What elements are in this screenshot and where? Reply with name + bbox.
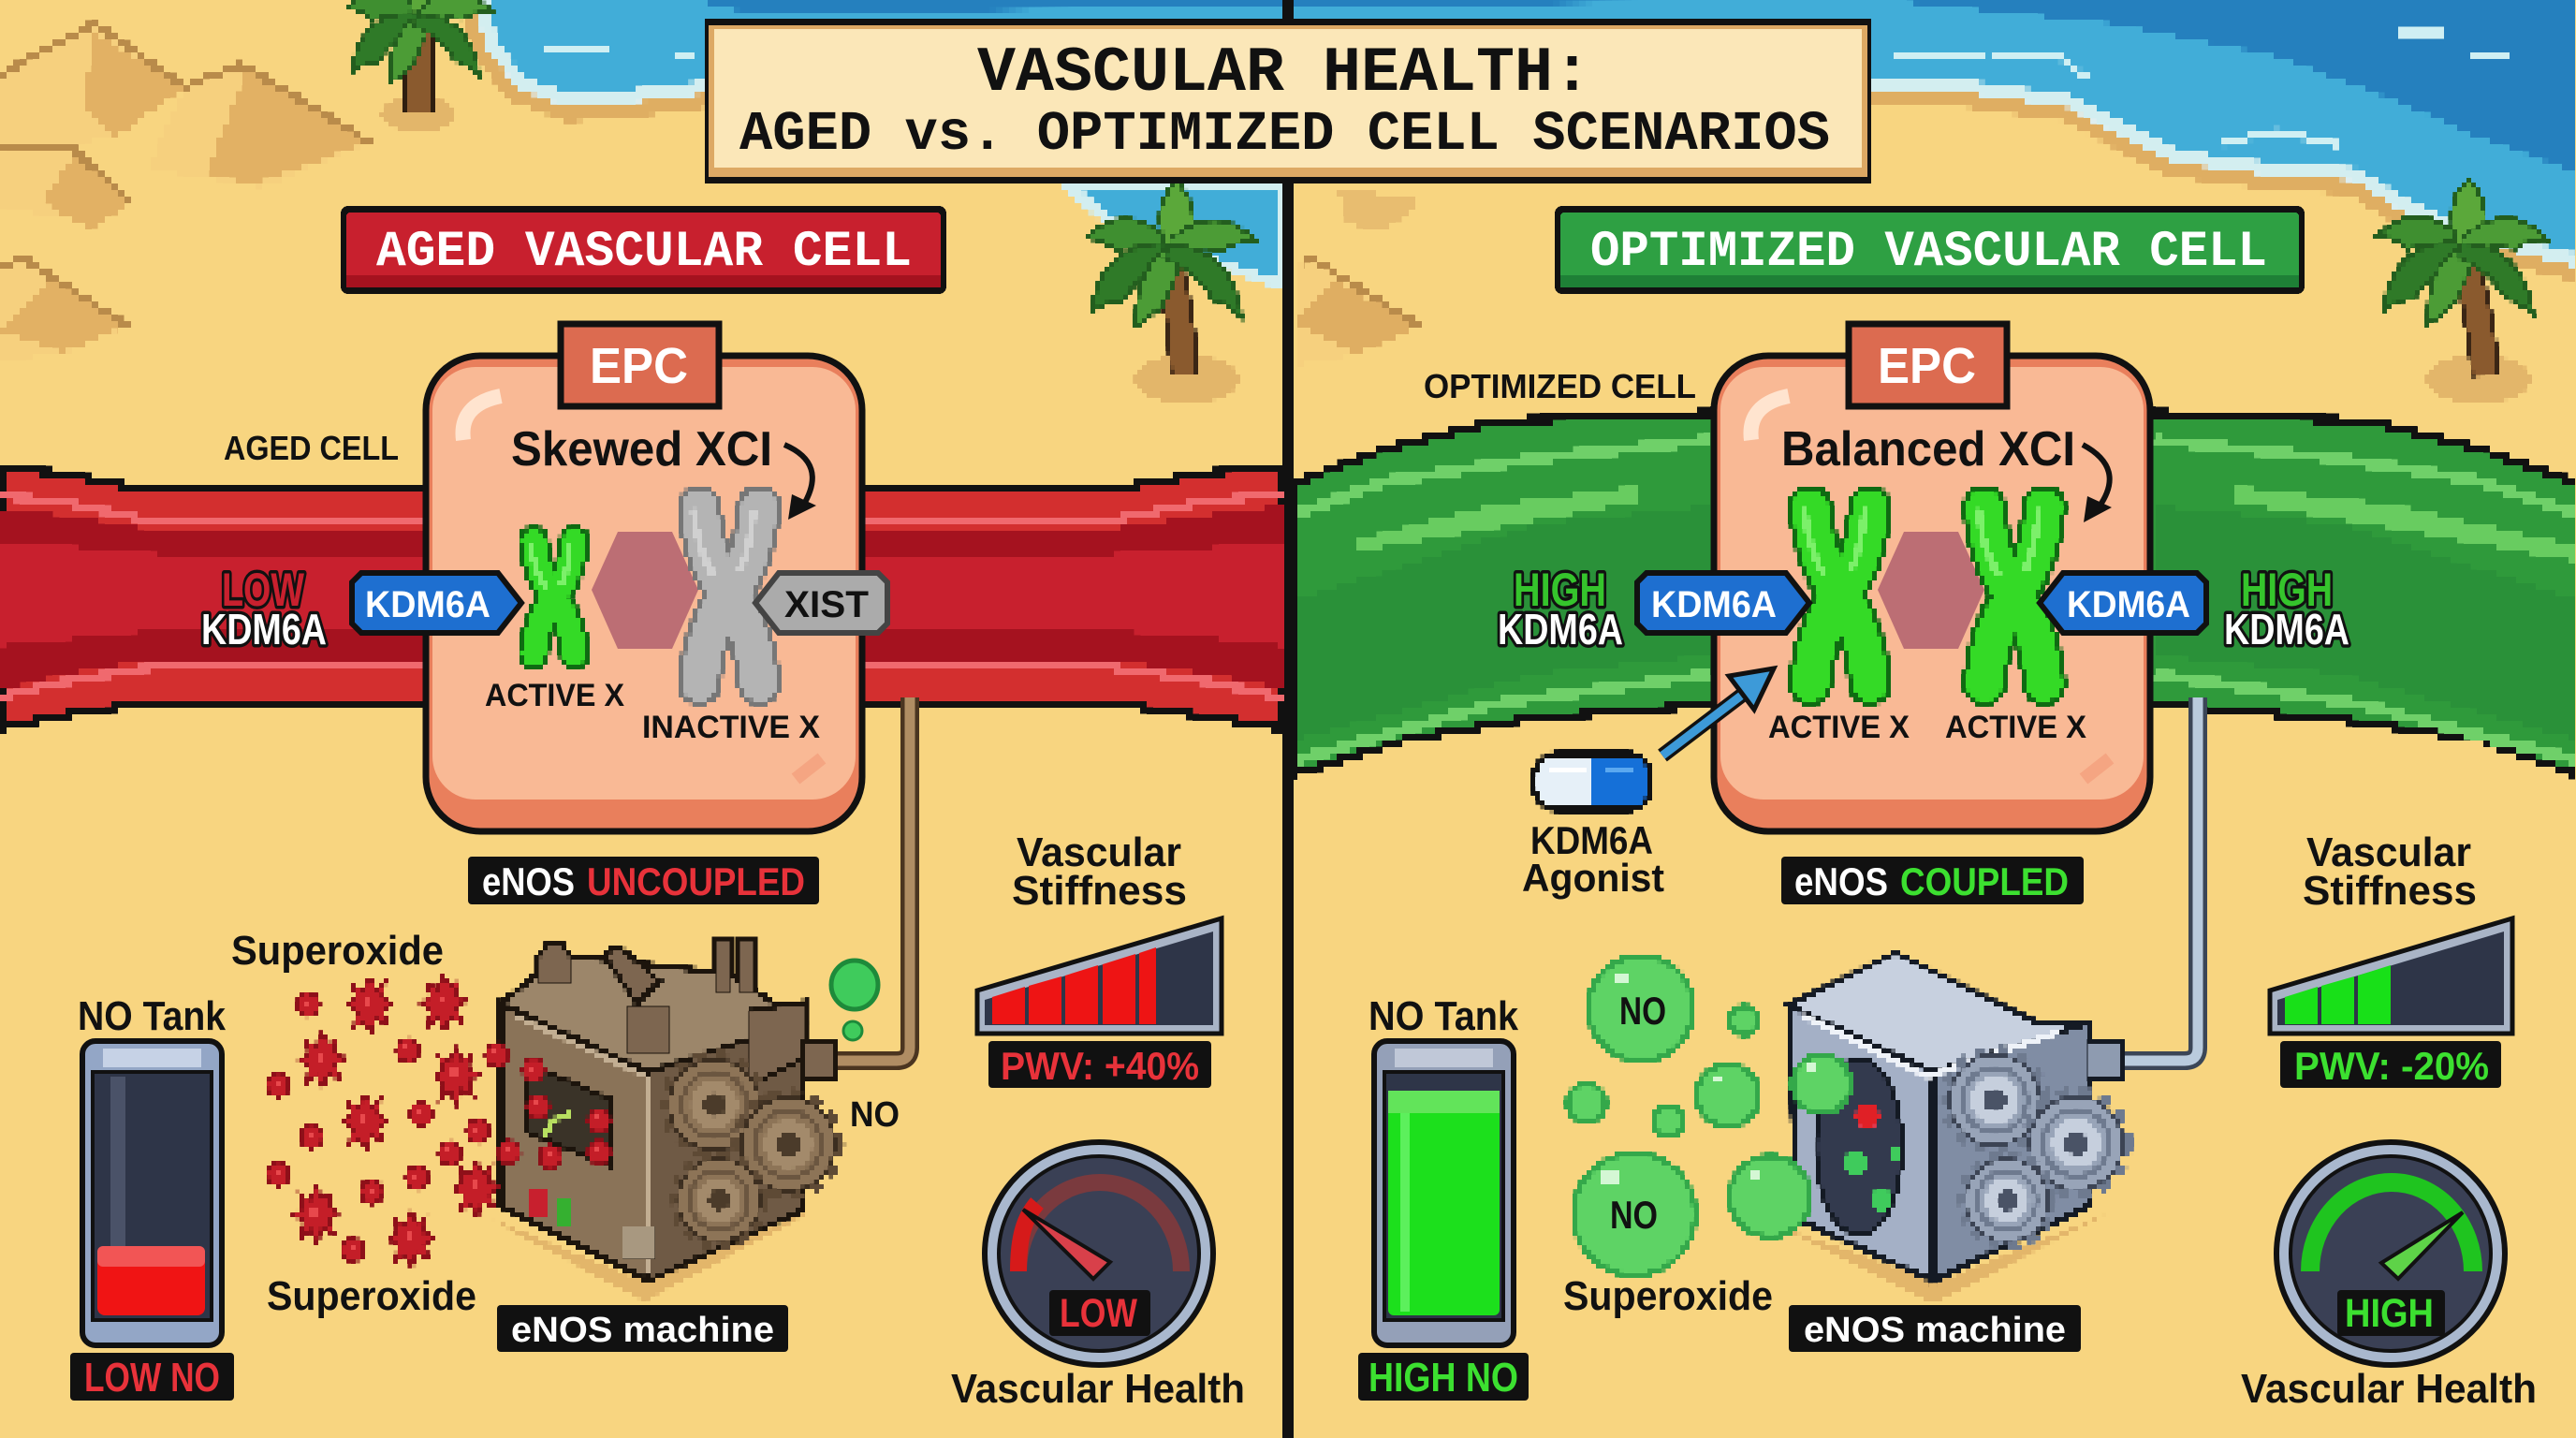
tag: KDM6A aged: KDM6A <box>365 584 490 625</box>
panel: EPC optimized <box>1714 324 2150 831</box>
pipe joint <box>803 1041 837 1080</box>
gauge: low: LOW <box>1060 1291 1137 1336</box>
label: vascular stiffness optimized: Vascular <box>2306 829 2471 875</box>
label: NO tank optimized: NO Tank <box>1368 993 1518 1039</box>
title line 2: AGED vs. OPTIMIZED CELL SCENARIOS <box>739 103 1830 166</box>
label: aged cell: AGED CELL <box>224 429 399 467</box>
label: eNOS machine aged: eNOS machine <box>511 1311 774 1350</box>
tag: KDM6A aged <box>352 573 521 633</box>
tag: KDM6A optimized right <box>2040 573 2206 633</box>
needle <box>1023 1210 1110 1279</box>
meter: stiffness optimized <box>2270 918 2512 1034</box>
panel: EPC aged <box>426 324 862 831</box>
screen <box>1816 1059 1902 1235</box>
banner: aged: AGED VASCULAR CELL <box>376 224 912 281</box>
NO bubble: large <box>831 961 878 1009</box>
label: eNOS machine optimized: eNOS machine <box>1804 1311 2066 1350</box>
inactive X chromosome <box>694 507 759 683</box>
label: active X left: ACTIVE X <box>1768 710 1910 745</box>
title line 1: VASCULAR HEALTH: <box>977 37 1591 110</box>
arrow: agonist to X <box>1662 668 1774 756</box>
EPC tab <box>1849 324 2007 406</box>
label: vascular stiffness aged: Vascular <box>1017 829 1181 875</box>
EPC label: EPC <box>1878 338 1976 394</box>
tank: high <box>1374 1041 1514 1345</box>
heading: skewed XCI: Skewed XCI <box>511 422 772 477</box>
tag: KDM6A optimized left <box>1637 573 1809 633</box>
gears <box>1947 1052 2125 1243</box>
active X chromosome right <box>1979 507 2044 683</box>
NO bubble label bottom: NO <box>1610 1193 1658 1237</box>
artery: aged <box>0 468 1281 728</box>
EPC tab <box>561 324 719 406</box>
label: KDM6A high right: KDM6A <box>2224 605 2349 653</box>
label: superoxide top: Superoxide <box>231 928 444 974</box>
palm tree: right panel right <box>2378 180 2548 404</box>
label: KDM6A high left: KDM6A <box>1498 605 1623 653</box>
label: vascular stiffness optimized <box>2303 829 2477 914</box>
heading: balanced XCI: Balanced XCI <box>1781 422 2075 477</box>
artery: optimized <box>1295 413 2576 774</box>
indicator line <box>545 1114 573 1137</box>
shadow highlight <box>796 758 822 779</box>
panel buttons <box>529 1187 654 1258</box>
pipe inner: aged <box>833 697 910 1061</box>
label: superoxide right panel: Superoxide <box>1563 1273 1773 1319</box>
pipe inner: optimized <box>2121 697 2198 1061</box>
label: KDM6A agonist: KDM6A <box>1530 818 1653 862</box>
NO bubble label top: NO <box>1619 989 1666 1033</box>
palm tree: left panel right <box>1086 182 1256 404</box>
screen <box>526 1063 612 1167</box>
chimneys <box>538 941 805 1086</box>
enos machine: optimized <box>1778 953 2125 1303</box>
curved arrow <box>2083 445 2112 522</box>
highlight <box>462 396 501 440</box>
label: NO: NO <box>850 1095 900 1135</box>
superoxide particles <box>267 976 610 1268</box>
label: superoxide bottom: Superoxide <box>267 1273 476 1319</box>
tag: KDM6A optimized right: KDM6A <box>2067 584 2190 625</box>
label: low NO: LOW NO <box>84 1355 220 1401</box>
label: active X right: ACTIVE X <box>1945 710 2086 745</box>
tag: XIST: XIST <box>784 584 869 625</box>
PWV aged: PWV: +40% <box>1001 1044 1199 1088</box>
banner: optimized: OPTIMIZED VASCULAR CELL <box>1590 224 2267 281</box>
label: inactive X: INACTIVE X <box>642 710 820 745</box>
label: low: LOW <box>222 564 305 616</box>
dunes <box>0 23 1423 365</box>
active X chromosome left <box>1805 507 1870 683</box>
label: vascular stiffness optimized: Stiffness <box>2303 868 2477 914</box>
indicators <box>1843 1104 1902 1211</box>
tag: XIST <box>755 573 887 633</box>
label: vascular stiffness aged: Stiffness <box>1012 868 1187 914</box>
banner: optimized <box>1555 206 2305 294</box>
NO bubbles <box>1568 956 1851 1275</box>
tag: KDM6A optimized left: KDM6A <box>1651 584 1777 625</box>
label: KDM6A agonist: Agonist <box>1522 856 1664 900</box>
label: vascular health optimized: Vascular Health <box>2241 1366 2537 1412</box>
label: KDM6A low: KDM6A <box>201 605 327 653</box>
pipe joint <box>2087 1041 2121 1080</box>
status: eNOS coupled: eNOS <box>1794 859 1888 903</box>
title banner <box>705 19 1871 183</box>
highlight <box>1750 396 1789 440</box>
enos machine: aged <box>487 941 837 1301</box>
vertical divider <box>1282 0 1294 1438</box>
label: optimized cell: OPTIMIZED CELL <box>1424 367 1696 405</box>
banner: aged <box>341 206 946 294</box>
pipe: optimized <box>2121 697 2198 1061</box>
curved arrow <box>784 445 816 520</box>
ocean <box>473 0 2576 285</box>
gauge: low <box>985 1142 1213 1365</box>
status: eNOS uncoupled <box>468 857 819 904</box>
label: active X: ACTIVE X <box>485 678 624 713</box>
needle <box>2381 1212 2463 1279</box>
nucleus <box>1878 532 1984 649</box>
label: vascular stiffness aged <box>1012 829 1187 914</box>
label: high NO: HIGH NO <box>1368 1355 1518 1401</box>
status: eNOS coupled: COUPLED <box>1900 859 2069 903</box>
label: KDM6A agonist <box>1522 818 1664 900</box>
meter: stiffness aged <box>977 918 1222 1034</box>
gauge: high <box>2276 1142 2505 1365</box>
status: eNOS uncoupled: eNOS <box>482 859 575 903</box>
palm tree: top left <box>346 0 491 132</box>
EPC label: EPC <box>590 338 688 394</box>
active X chromosome <box>531 541 575 653</box>
shadow highlight <box>2084 758 2110 779</box>
tank: low <box>82 1041 222 1345</box>
PWV optimized: PWV: -20% <box>2294 1044 2489 1088</box>
icon: pill <box>1534 754 1651 810</box>
NO bubble: small <box>843 1021 862 1040</box>
label: high left: HIGH <box>1514 564 1606 616</box>
status: eNOS coupled <box>1781 857 2084 904</box>
nucleus <box>592 532 698 649</box>
pipe: aged <box>833 697 910 1061</box>
label: vascular health aged: Vascular Health <box>951 1366 1245 1412</box>
label: NO tank aged: NO Tank <box>78 993 226 1039</box>
status: eNOS uncoupled: UNCOUPLED <box>587 859 805 903</box>
gauge: high: HIGH <box>2345 1291 2434 1336</box>
label: high right: HIGH <box>2241 564 2333 616</box>
gears <box>666 1057 837 1243</box>
